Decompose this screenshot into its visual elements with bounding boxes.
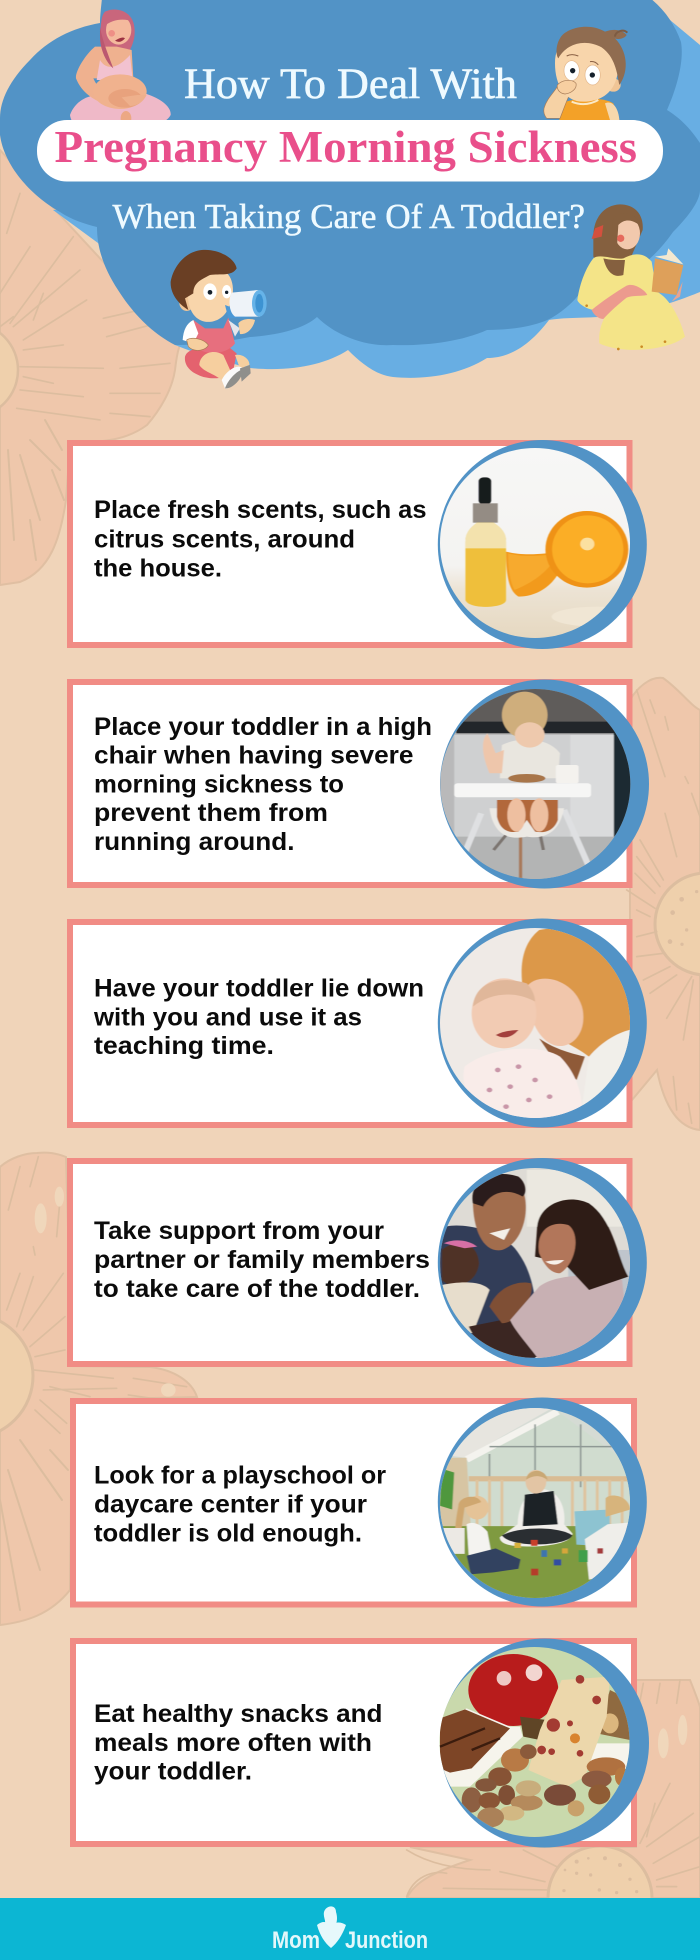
background flower: upper left: [0, 150, 180, 585]
background flower: middle right: [627, 678, 700, 1130]
panel 5 photo: daycare classroom: [440, 1406, 635, 1611]
panel 6 ring: [440, 1638, 649, 1848]
panel 1 text: citrus scents, around: [94, 526, 355, 554]
panel 1 photo: dropper bottle and orange: [440, 448, 643, 638]
panel 5 text: toddler is old enough.: [94, 1520, 362, 1548]
panel 6 photo: apple, chocolate, granola bar and nuts: [439, 1647, 630, 1838]
logo icon: mother and heart: [317, 1906, 346, 1948]
panel 2 text: prevent them from: [94, 799, 328, 827]
footer band: [0, 1898, 700, 1960]
background flower: lower right: [407, 1680, 700, 1950]
MomJunction logo: Mom: [272, 1927, 320, 1954]
panel 3 ring: [438, 918, 647, 1128]
panel 6 text: your toddler.: [94, 1758, 252, 1786]
title text: Pregnancy Morning Sickness: [54, 122, 637, 172]
MomJunction logo: Junction: [345, 1927, 428, 1954]
panel 6 text: Eat healthy snacks and: [94, 1700, 382, 1728]
panel 2 text: morning sickness to: [94, 770, 344, 798]
panel 4 ring: [438, 1158, 647, 1367]
illustration: baby drinking from a cup: [171, 250, 267, 389]
panel 2 text: chair when having severe: [94, 742, 414, 770]
background flower: lower left: [0, 1153, 197, 1625]
panel 5: playschool: [73, 1398, 647, 1611]
panel 4 text: partner or family members: [94, 1246, 430, 1274]
panel 3: lie down together: [70, 918, 647, 1128]
panel 6 text: [94, 1700, 382, 1786]
panel 1 text: the house.: [94, 554, 222, 582]
panel 2: high chair: [70, 680, 649, 888]
title text: [54, 61, 637, 236]
panel 4 text: Take support from your: [94, 1217, 384, 1245]
panel 3 text: teaching time.: [94, 1032, 274, 1060]
panel 4 photo: parents with toddler: [440, 1168, 639, 1360]
panel 1: fresh scents: [70, 440, 647, 649]
header cloud: light layer: [53, 20, 700, 378]
panel 3 photo: mother and baby: [440, 928, 639, 1123]
panel 3 text: Have your toddler lie down: [94, 974, 424, 1002]
illustration: pregnant woman reading a book: [577, 204, 685, 350]
illustration: pregnant woman sitting: [70, 9, 171, 128]
panel 2 text: running around.: [94, 828, 294, 856]
panel 2 text: Place your toddler in a high: [94, 713, 432, 741]
panel 1 text: Place fresh scents, such as: [94, 496, 426, 524]
panel 5 text: daycare center if your: [94, 1490, 367, 1518]
panel 3 text: with you and use it as: [93, 1004, 362, 1032]
panel 6 text: meals more often with: [94, 1729, 372, 1757]
panel 1 text: [94, 496, 426, 582]
MomJunction logo: [272, 1906, 428, 1954]
panel 2 text: [94, 713, 432, 856]
panel 2 ring: [440, 680, 649, 888]
panel 4 text: [94, 1217, 430, 1303]
header cloud: dark layer: [0, 0, 700, 345]
panel 5 ring: [438, 1398, 647, 1606]
title pill: [37, 120, 663, 182]
title text: How To Deal With: [184, 61, 517, 108]
panel 4 text: to take care of the toddler.: [94, 1275, 420, 1303]
title text: When Taking Care Of A Toddler?: [112, 197, 585, 236]
illustration: toddler with hand on mouth: [544, 27, 627, 123]
panel 6: healthy snacks: [73, 1638, 649, 1848]
panel 2 photo: toddler in a high chair: [440, 687, 639, 883]
panel 5 text: [94, 1462, 386, 1548]
panel 5 text: Look for a playschool or: [94, 1462, 386, 1490]
panel 4: family support: [70, 1158, 647, 1367]
panel 1 ring: [438, 440, 647, 649]
panel 3 text: [93, 974, 424, 1060]
